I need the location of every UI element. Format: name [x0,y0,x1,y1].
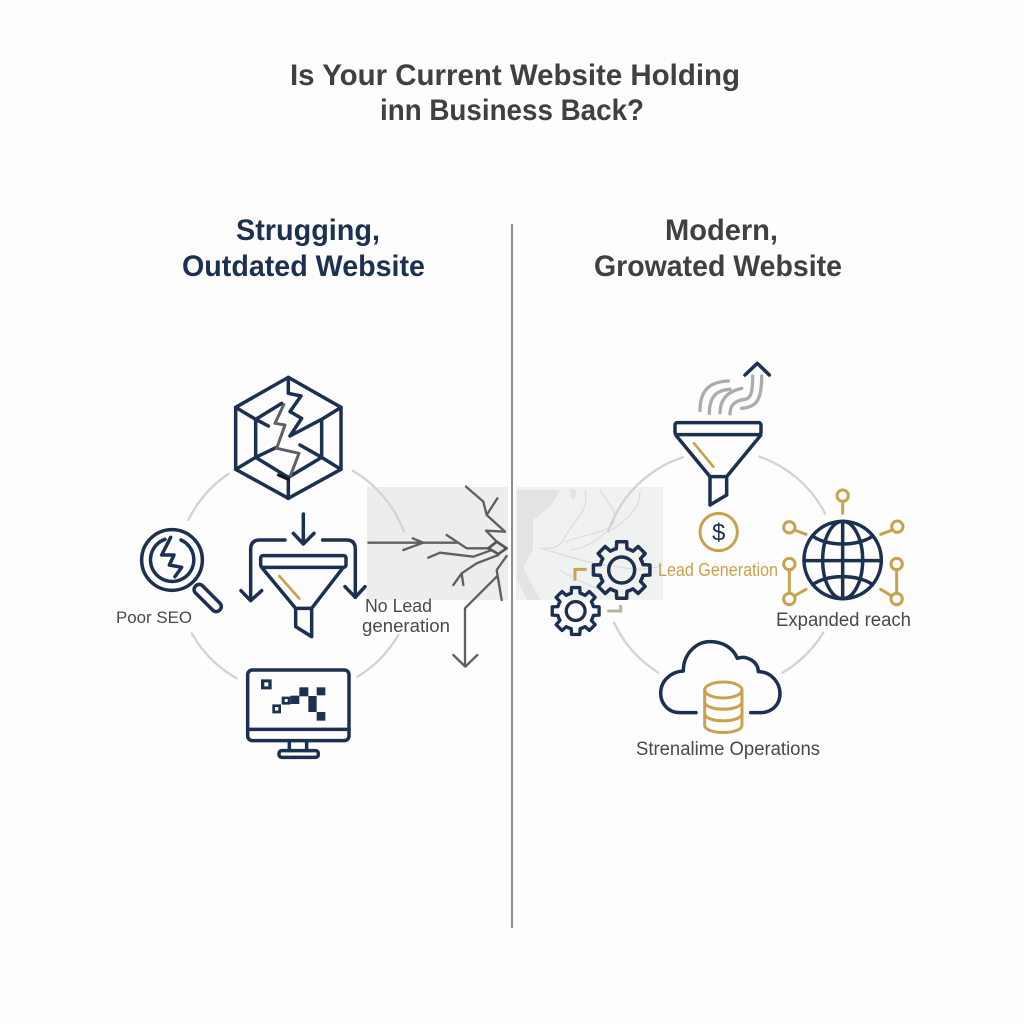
heading: modern website [594,214,842,283]
label: no lead generation: No Lead [365,596,432,616]
icon: globe with network nodes [784,490,903,605]
label: streamline operations: Strenalime Operations [636,739,820,760]
left cycle group [142,377,507,757]
cycle ring arcs [188,471,404,678]
heading: struggling website: Outdated Website [182,250,425,283]
right cycle group [552,363,903,732]
label: expanded reach: Expanded reach [776,610,911,631]
panel: left crack backdrop [367,487,508,600]
heading: struggling website [182,214,425,283]
title: Is Your Current Website Holding [290,59,740,92]
icon: funnel with rising arrow [675,363,769,505]
icon: dollar coin [700,513,737,551]
label: no lead generation [362,596,450,636]
title [290,59,740,127]
panel: right marbled backdrop [516,487,663,600]
label: no lead generation: generation [362,616,450,636]
cycle ring arcs [608,457,825,673]
heading: modern website: Growated Website [594,250,842,283]
heading: modern website: Modern, [665,214,778,247]
center divider [511,224,513,928]
icon: gears [552,542,650,634]
title: inn Business Back? [380,94,644,127]
heading: struggling website: Strugging, [236,214,380,247]
icon: cloud with database [661,642,780,732]
crack lines and arrow [368,487,507,667]
label: poor seo: Poor SEO [116,608,192,627]
icon: cracked hexagon [236,377,341,498]
icon: magnifier with bolt [142,530,223,614]
icon: funnel with diverted arrows [241,514,365,637]
icon: dollar coin: $ [712,519,725,546]
icon: monitor with broken pixels [248,670,349,757]
label: lead generation: Lead Generation [658,560,778,580]
